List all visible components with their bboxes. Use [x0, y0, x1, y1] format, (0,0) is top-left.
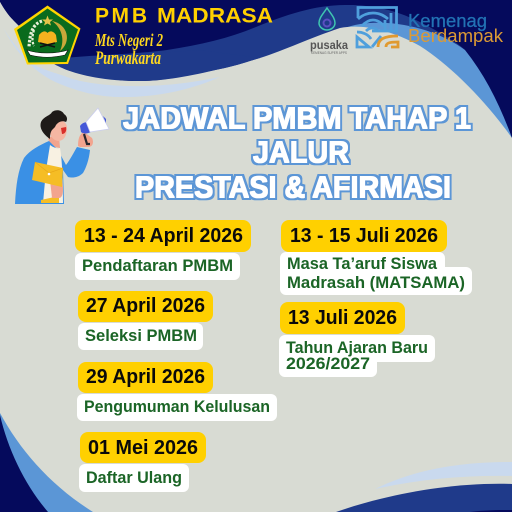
- schedule item: 27 April 2026: [78, 291, 213, 350]
- logo: Pusaka: KEMENAG SUPER APPS: [311, 51, 348, 55]
- logo: Kemenag Berdampak: Kemenag: [408, 11, 487, 31]
- title: PRESTASI & AFIRMASI: [135, 170, 451, 204]
- schedule item: 13 - 24 April 2026: 13 - 24 April 2026: [84, 225, 243, 247]
- logo: Pusaka: [310, 8, 349, 55]
- schedule item: 13 Juli 2026: Tahun Ajaran Baru: [286, 339, 428, 357]
- title: JALUR: [253, 136, 349, 170]
- schedule item: 13 - 15 Juli 2026: Masa Ta’aruf Siswa: [287, 255, 438, 273]
- schedule item: 27 April 2026: 27 April 2026: [86, 295, 205, 317]
- schedule item: 13 - 15 Juli 2026: 13 - 15 Juli 2026: [290, 225, 438, 247]
- schedule item: 13 - 15 Juli 2026: Madrasah (MATSAMA): [287, 274, 465, 292]
- schedule item: 13 - 24 April 2026: Pendaftaran PMBM: [82, 257, 233, 275]
- heading: PMB Madrasa: [95, 4, 273, 28]
- logo: Kemenag emblem: [14, 6, 80, 64]
- illustration: person with megaphone: [15, 108, 109, 204]
- schedule item: 01 Mei 2026: Daftar Ulang: [86, 469, 182, 487]
- heading: PMB Madrasa: MADRASA: [157, 4, 273, 28]
- schedule item: 29 April 2026: Pengumuman Kelulusan: [84, 398, 270, 416]
- logo: Pusaka: pusaka: [310, 40, 349, 52]
- bottom right wave: [336, 462, 512, 512]
- heading: PMB Madrasa: P M B: [95, 4, 147, 28]
- schedule item: 13 - 24 April 2026: [75, 220, 251, 280]
- schedule item: 13 Juli 2026: 2026/2027: [286, 355, 370, 373]
- schedule item: 13 - 15 Juli 2026: [280, 220, 472, 295]
- schedule item: 01 Mei 2026: 01 Mei 2026: [88, 437, 198, 459]
- logo: Kemenag Berdampak: Berdampak: [408, 26, 504, 46]
- schedule item: 29 April 2026: [77, 362, 277, 421]
- bottom left wave: [0, 413, 93, 512]
- schedule item: 29 April 2026: 29 April 2026: [86, 366, 205, 388]
- title: [123, 102, 471, 204]
- schedule item: 13 Juli 2026: 13 Juli 2026: [288, 307, 397, 329]
- title: JADWAL PMBM TAHAP 1: [123, 102, 471, 136]
- schedule item: 13 Juli 2026: [279, 302, 435, 377]
- school name: Mts Negeri 2: [94, 30, 163, 50]
- schedule item: 27 April 2026: Seleksi PMBM: [85, 327, 197, 345]
- header background wave: [0, 0, 512, 230]
- schedule item: 01 Mei 2026: [79, 432, 206, 492]
- school name: [94, 30, 163, 69]
- logo: Kemenag Berdampak: [357, 8, 504, 47]
- school name: Purwakarta: [94, 48, 161, 69]
